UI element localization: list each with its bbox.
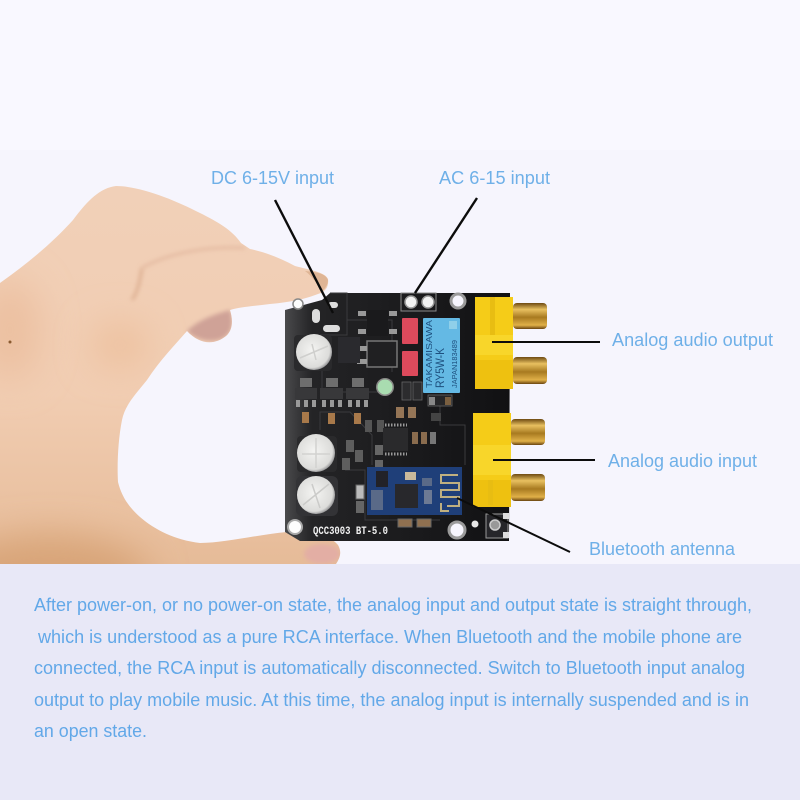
small SMD parts <box>302 382 452 527</box>
label: AC input: AC 6-15 input <box>439 168 550 188</box>
blue relay: RY5W-K <box>435 348 447 388</box>
label: analog audio input: Analog audio input <box>608 451 757 471</box>
circuit board <box>285 293 510 541</box>
description paragraph: connected, the RCA input is automatically disconnected. Switch to Bluetooth input analog <box>34 658 745 678</box>
description paragraph: output to play mobile music. At this time, the analog input is internally suspended and is in <box>34 690 749 710</box>
description paragraph: After power-on, or no power-on state, the analog input and output state is straight through, <box>34 595 752 615</box>
voltage regulators <box>295 310 397 407</box>
description paragraph <box>34 595 752 741</box>
label: DC input: DC 6-15V input <box>211 168 334 188</box>
mounting holes and AC pads <box>288 293 465 538</box>
label: bluetooth antenna: Bluetooth antenna <box>589 539 736 559</box>
callout lines <box>275 198 600 552</box>
blue relay: JAPAN183489 <box>450 340 459 388</box>
board silkscreen label: QCC3003 BT-5.0 <box>313 526 388 538</box>
board traces <box>320 293 465 520</box>
description paragraph: which is understood as a pure RCA interface. When Bluetooth and the mobile phone are <box>37 627 742 647</box>
label: analog audio output: Analog audio output <box>612 330 773 350</box>
hand holding the board <box>0 186 340 564</box>
green capacitor <box>376 378 394 396</box>
RCA output connector <box>475 297 547 389</box>
main IC <box>383 425 408 454</box>
red film capacitors <box>402 318 418 376</box>
bluetooth module <box>367 467 462 515</box>
electrolytic capacitors <box>294 334 338 516</box>
antenna connector <box>472 513 509 538</box>
description paragraph: an open state. <box>34 721 147 741</box>
blue relay <box>423 318 460 393</box>
blue relay: TAKAMISAWA <box>425 319 434 388</box>
board substrate <box>285 293 510 541</box>
RCA input connector <box>473 413 545 507</box>
